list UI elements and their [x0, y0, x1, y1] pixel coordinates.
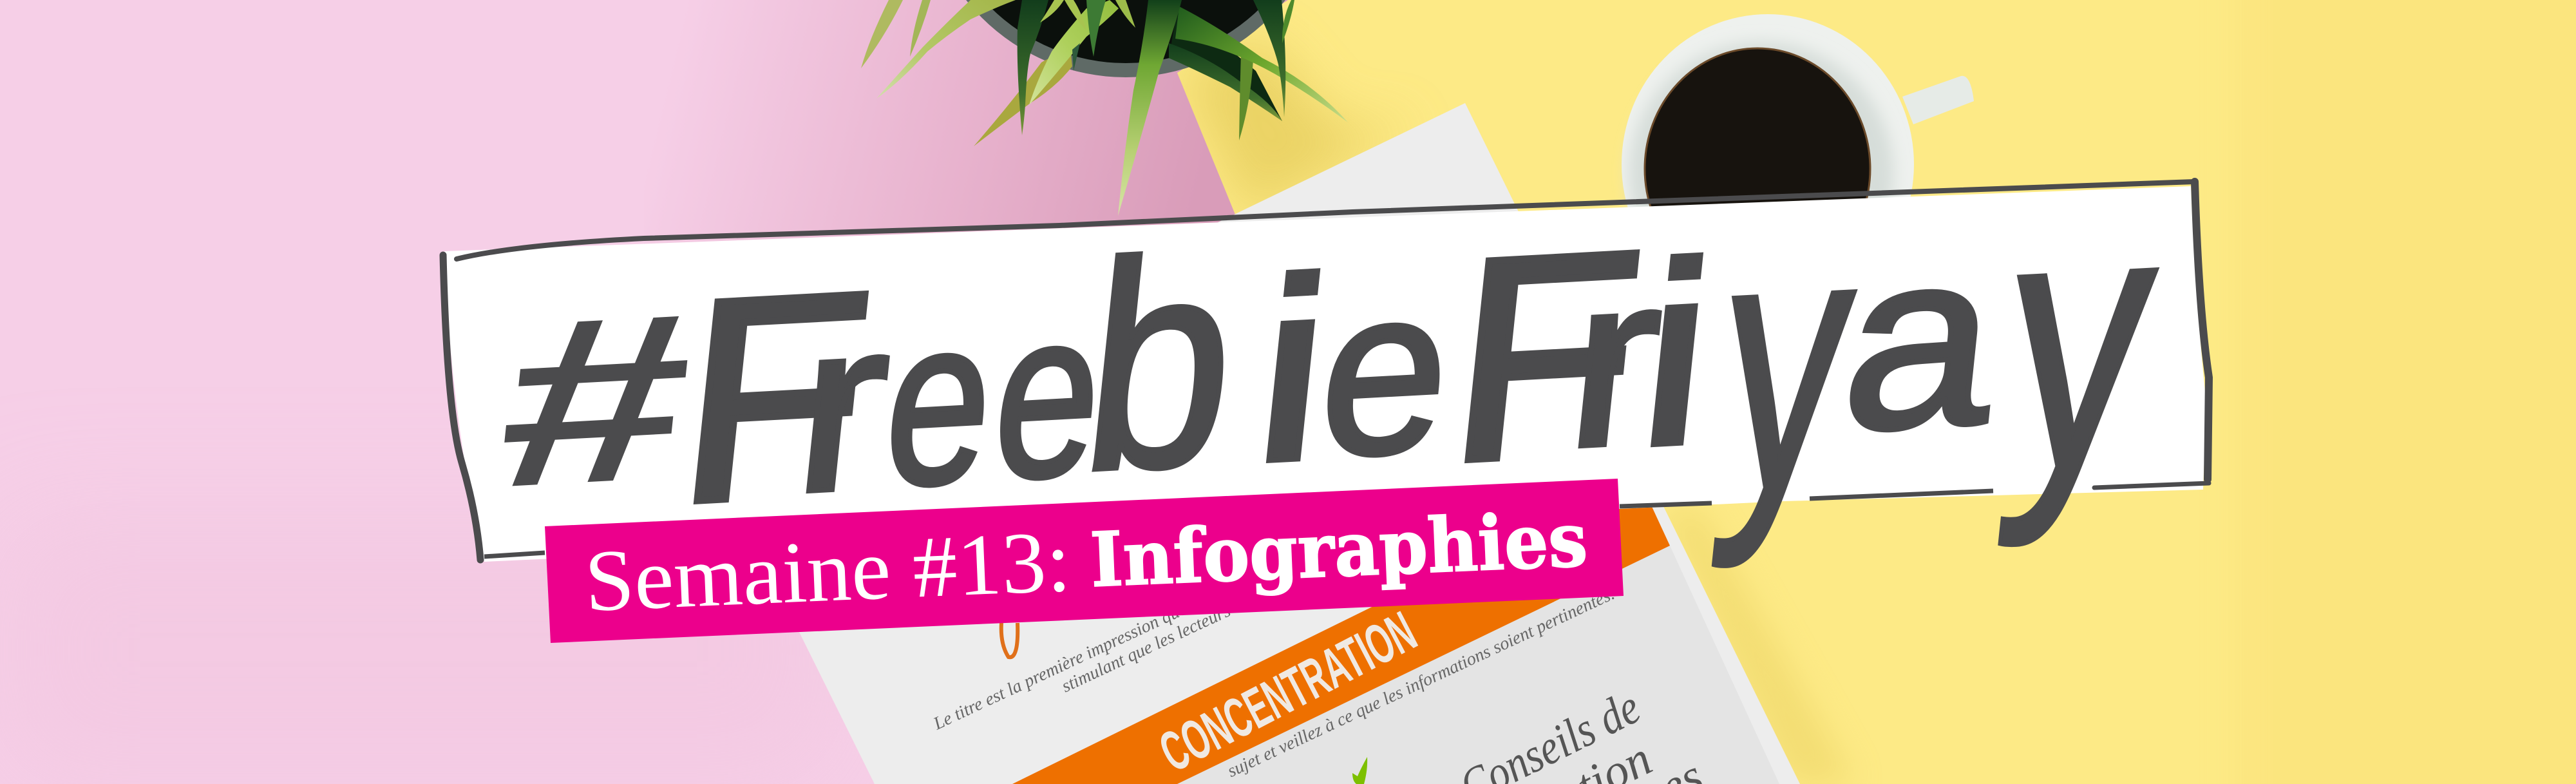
title: #FreebieFriyay: e — [875, 266, 1005, 536]
band label: CONCENTRATION: CONCENTRATION — [1150, 599, 1426, 784]
leaves — [861, 0, 903, 68]
paper body text above the band: stimulant que les lecteurs — [1059, 601, 1234, 696]
title: #FreebieFriyay: i — [1242, 224, 1343, 517]
cup handle — [1902, 76, 1974, 124]
title: #FreebieFriyay: r — [1558, 222, 1673, 499]
title: #FreebieFriyay: F — [1437, 190, 1654, 522]
subtitle: Semaine #13: Semaine #13: — [583, 513, 1073, 630]
infographic paper sheet — [716, 103, 1800, 784]
cup rim — [1622, 14, 1914, 314]
title: #FreebieFriyay: b — [1071, 196, 1250, 533]
subtitle: Infographies: Infographies — [1088, 496, 1589, 604]
title: #FreebieFriyay: y — [1705, 155, 1870, 571]
orange band — [1012, 476, 1670, 784]
title: #FreebieFriyay: e — [983, 259, 1114, 529]
title: #FreebieFriyay: y — [1991, 133, 2172, 550]
icon: orange loop — [1001, 623, 1018, 657]
title: #FreebieFriyay: # — [489, 263, 703, 538]
title: #FreebieFriyay: i — [1628, 208, 1725, 501]
pot — [922, 0, 1329, 77]
title: #FreebieFriyay: r — [786, 267, 901, 543]
title: #FreebieFriyay: a — [1832, 196, 2011, 484]
coffee — [1645, 48, 1870, 289]
subtitle ribbon — [545, 479, 1624, 643]
paper body text below the band: sujet et veillez à ce que les informations soient pertinentes. — [1224, 584, 1618, 781]
paper lower section — [1177, 546, 1779, 784]
title: #FreebieFriyay: e — [1309, 235, 1463, 506]
background: yellow sheet — [1177, 0, 2576, 784]
coffee cup — [1622, 14, 1974, 314]
plant in pot — [861, 0, 1348, 216]
paper body text above the band: Le titre est la première impression que — [930, 599, 1189, 734]
white title panel with hand-drawn border — [443, 182, 2209, 562]
icon: green check — [1352, 757, 1367, 784]
title: #FreebieFriyay: F — [667, 231, 884, 563]
